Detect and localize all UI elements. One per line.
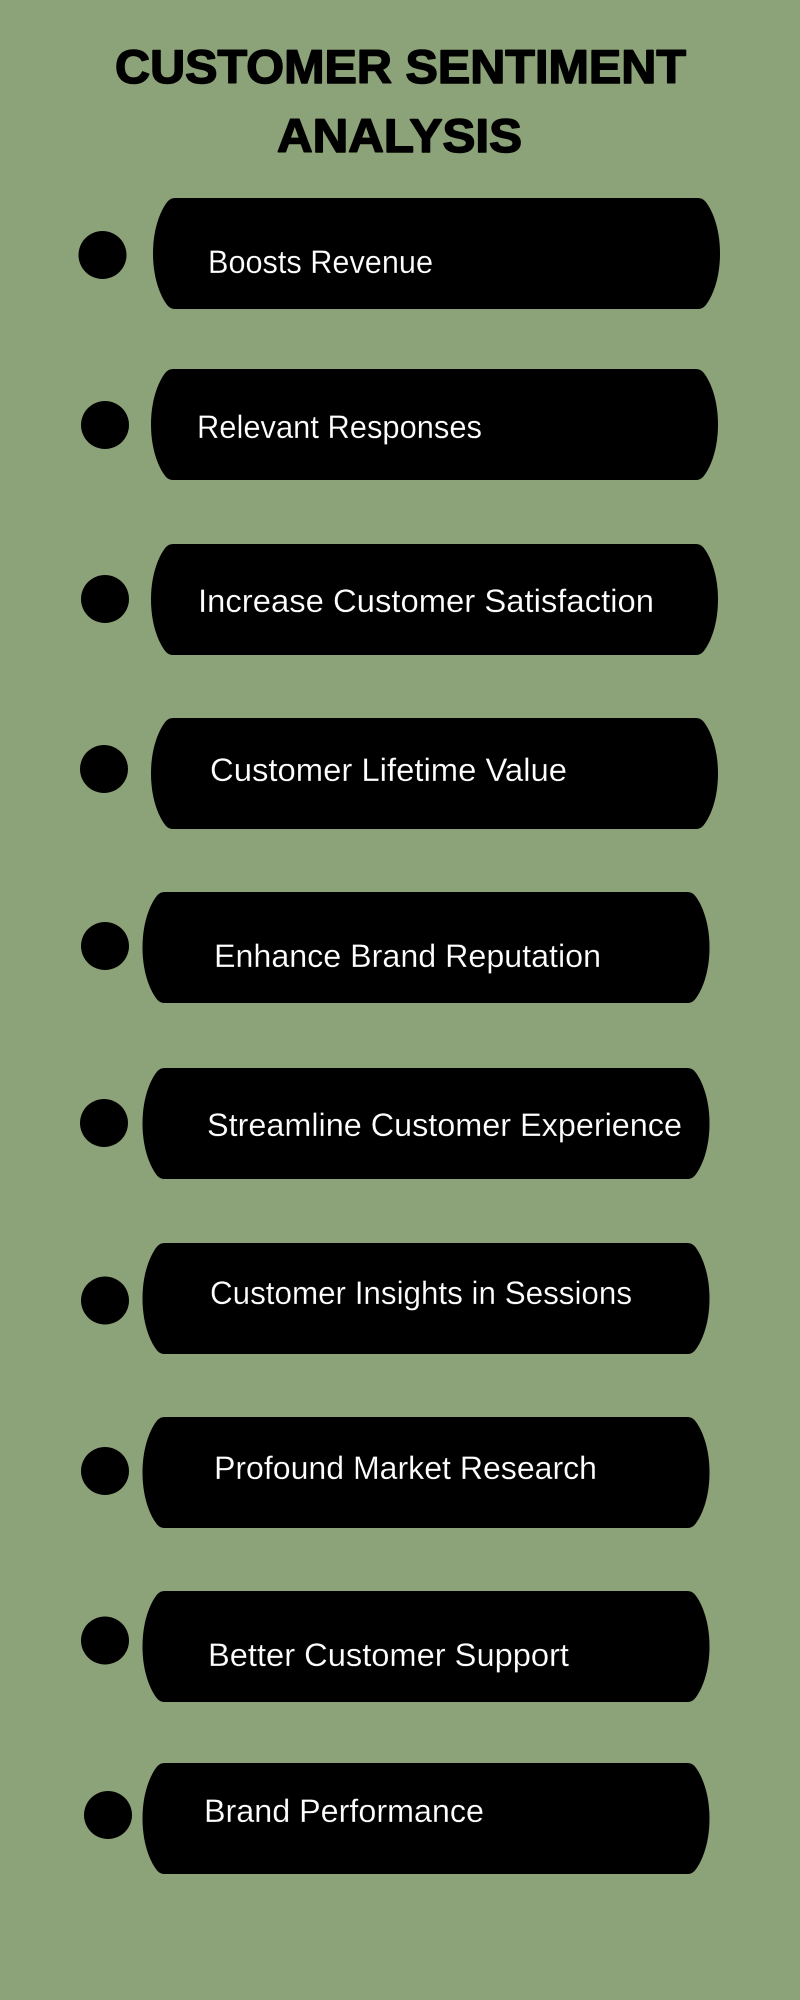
item: Increase Customer Satisfaction bbox=[81, 544, 718, 655]
pill bbox=[151, 369, 718, 480]
label: Increase Customer Satisfaction bbox=[198, 583, 654, 619]
item: Boosts Revenue bbox=[78, 198, 720, 309]
label: Better Customer Support bbox=[208, 1637, 569, 1673]
label: Streamline Customer Experience bbox=[207, 1107, 682, 1143]
label: Customer Lifetime Value bbox=[210, 752, 567, 788]
item: Better Customer Support bbox=[81, 1591, 710, 1702]
pill bbox=[142, 1068, 710, 1179]
bullet dot bbox=[81, 922, 129, 970]
title bbox=[115, 41, 686, 163]
bullet dot bbox=[80, 1099, 128, 1147]
pill bbox=[151, 544, 718, 655]
label: Profound Market Research bbox=[214, 1450, 597, 1486]
title: ANALYSIS bbox=[277, 110, 522, 163]
label: Boosts Revenue bbox=[208, 244, 433, 280]
item: Brand Performance bbox=[84, 1763, 710, 1874]
bullet dot bbox=[81, 401, 129, 449]
pill bbox=[142, 892, 710, 1003]
bullet dot bbox=[81, 575, 129, 623]
bullet dot bbox=[80, 745, 128, 793]
label: Customer Insights in Sessions bbox=[210, 1275, 632, 1311]
bullet dot bbox=[81, 1447, 129, 1495]
pill bbox=[142, 1591, 710, 1702]
bullet dot bbox=[81, 1276, 129, 1324]
label: Enhance Brand Reputation bbox=[214, 938, 601, 974]
label: Relevant Responses bbox=[197, 409, 482, 445]
item: Relevant Responses bbox=[81, 369, 718, 480]
item: Profound Market Research bbox=[81, 1417, 710, 1528]
pill bbox=[142, 1243, 710, 1354]
label: Brand Performance bbox=[204, 1793, 484, 1829]
pill bbox=[153, 198, 720, 309]
item: Streamline Customer Experience bbox=[80, 1068, 710, 1179]
item: Enhance Brand Reputation bbox=[81, 892, 710, 1003]
title: CUSTOMER SENTIMENT bbox=[115, 41, 686, 94]
item: Customer Lifetime Value bbox=[80, 718, 718, 829]
bullet dot bbox=[84, 1791, 132, 1839]
pill bbox=[142, 1417, 710, 1528]
item: Customer Insights in Sessions bbox=[81, 1243, 710, 1354]
bullet dot bbox=[81, 1616, 129, 1664]
bullet dot bbox=[78, 231, 126, 279]
pill bbox=[151, 718, 718, 829]
pill bbox=[142, 1763, 710, 1874]
